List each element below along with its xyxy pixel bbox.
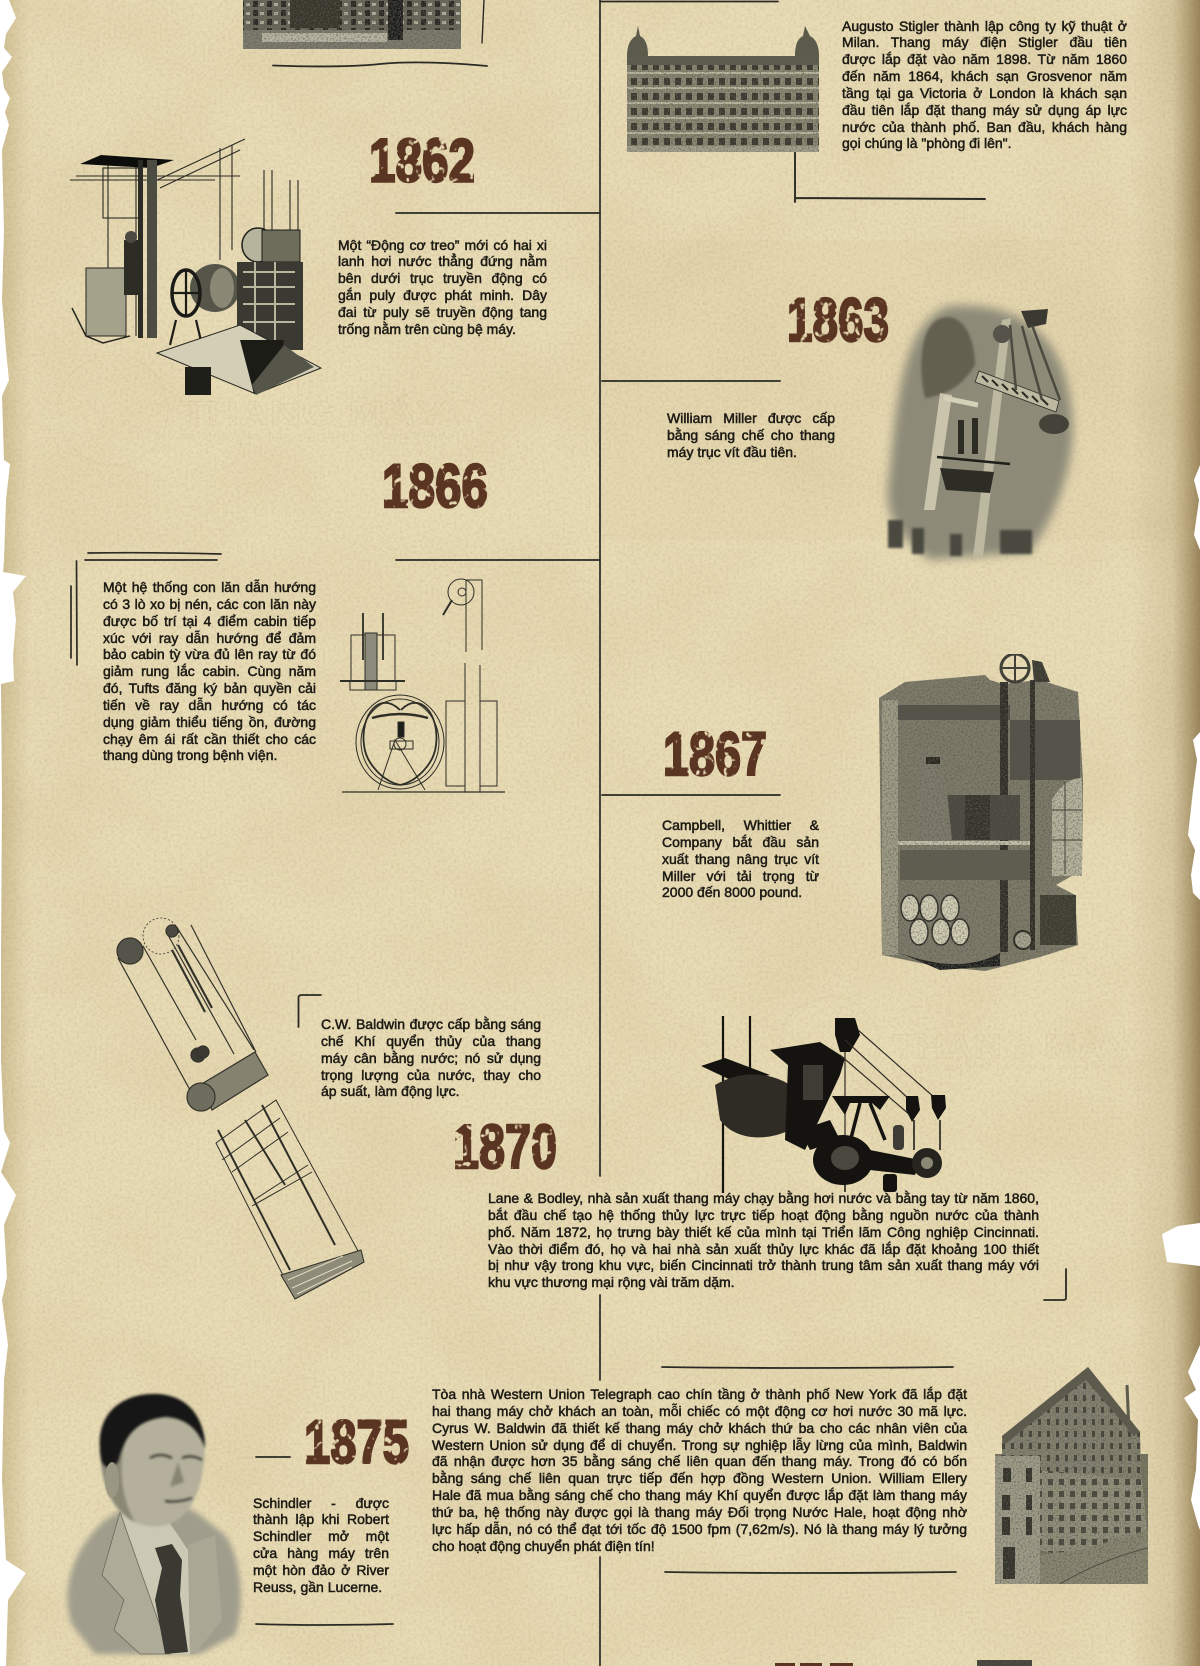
text: 1863 description: máy trục vít đầu tiên.	[667, 444, 797, 460]
text: 1866 description: bảo cabin tỳ vừa đủ lên ray từ đó	[103, 646, 316, 662]
text: Western Union building: hai thang máy chở khách an toàn, mỗi chiếc có một động cơ hơi nước 30 mã lực.	[432, 1403, 967, 1419]
text: Lane and Bodley: Vào thời điểm đó, họ và hai nhà sản xuất thủy lực khác đã lắp đặt khoảng 100 thiết	[488, 1241, 1039, 1257]
image: Grosvenor hotel	[627, 26, 819, 152]
text: Western Union building: lực hấp dẫn, nó có thể đạt tới tốc độ 1500 fpm (7,62m/s). Nó là thang máy lý tưởng	[432, 1521, 967, 1537]
year 1870: 1870	[453, 1113, 557, 1182]
year 1867: 1867	[663, 720, 767, 788]
text: Augusto Stigler: được lắp đặt vào năm 1898. Từ năm 1860	[842, 51, 1127, 67]
text: Augusto Stigler: Augusto Stigler thành lập công ty kỹ thuật ở	[842, 18, 1127, 34]
watermark: EV Thang Máy middle: THANG MÁY	[892, 1028, 1132, 1066]
watermark: EV Thang Máy upper	[58, 355, 445, 465]
text: Western Union building: Hale đã mua bằng sáng chế cho thang máy Khí quyển được lắp đặt làm thang máy	[432, 1487, 967, 1503]
text: 1866 description: thang dùng trong bệnh viện.	[103, 747, 277, 763]
year 1866: 1866	[382, 452, 488, 520]
bottom edge: next year heading cropped	[775, 1663, 853, 1666]
image: 1870 hydraulic machine	[701, 1016, 946, 1193]
image: 1866 guide roller patent drawing	[340, 579, 505, 792]
text: 1862 description: lanh hơi nước thẳng đứng nằm	[338, 253, 547, 269]
text: Augusto Stigler: đầu tiên lắp đặt thang máy sử dụng áp lực	[842, 102, 1127, 118]
text: C.W. Baldwin	[320, 1016, 541, 1100]
text: Augusto Stigler	[842, 18, 1127, 152]
year 1875: 1875	[304, 1408, 409, 1476]
text: Augusto Stigler: đến năm 1864, khách sạn Grosvenor năm	[842, 68, 1127, 84]
text: Schindler: một hòn đảo ở River	[253, 1562, 389, 1578]
text: 1862 description: trống nằm trên cùng bệ máy.	[338, 321, 516, 337]
text: 1867 description: Company bắt đầu sản	[662, 834, 819, 850]
text: Western Union building: cho hoạt động chuyển phát điện tín!	[432, 1538, 655, 1554]
text: Schindler: cửa hàng máy trên	[253, 1545, 389, 1561]
text: Western Union building: thứ ba, hệ thống này được gọi là thang máy Đối trọng Nước Hale, hoạt động nhờ	[432, 1504, 967, 1520]
text: 1866 description: tiến về ray dẫn hướng có tác	[103, 697, 316, 713]
text: 1866 description: dụng giảm thiểu tiếng ồn, đường	[103, 714, 316, 730]
text: 1866 description: Một hệ thống con lăn dẫn hướng	[103, 579, 316, 595]
text: C.W. Baldwin: chế Khí quyển thủy của thang	[321, 1033, 541, 1049]
text: Western Union building: Tòa nhà Western Union Telegraph cao chín tầng ở thành phố New York đã lắp đặt	[432, 1386, 967, 1402]
bottom edge: next image cropped	[977, 1660, 1032, 1666]
text: 1867 description	[662, 817, 820, 900]
watermark: EV Thang Máy middle	[780, 997, 1132, 1097]
text: Augusto Stigler: tầng tại ga Victoria ở London là khách sạn	[842, 85, 1127, 101]
image: Robert Schindler portrait	[67, 1394, 241, 1654]
image: 1863 elevator demonstration	[888, 306, 1073, 560]
text: 1866 description: giảm rung lắc cabin. Cùng năm	[103, 663, 316, 679]
year 1862: 1862	[369, 126, 475, 194]
watermark: EV Thang Máy upper: CƠ QUAN CỦA HIỆP HỘI THANG MÁY VIỆT NAM	[180, 432, 445, 441]
image: engraving of shop front, cropped at top	[243, 0, 461, 49]
text: Lane and Bodley: phố. Năm 1872, họ trưng bày thiết kế của mình tại Triển lãm Công nghiệp Cincinnati.	[488, 1224, 1039, 1240]
text: 1862 description	[338, 236, 548, 338]
text: 1862 description: Một “Động cơ treo” mới có hai xi	[338, 236, 547, 252]
text: 1867 description: xuất thang nâng trục vít	[662, 851, 819, 867]
image: Western Union building	[995, 1367, 1148, 1584]
text: Schindler	[252, 1494, 390, 1596]
text: Western Union building: Western Union sử dụng để di chuyển. Trong sự nghiệp lẫy lừng của mình, Baldwin	[432, 1437, 967, 1453]
text: 1866 description: có 3 lò xo bị nén, các con lăn này	[103, 596, 316, 612]
text: Lane and Bodley: Lane & Bodley, nhà sản xuất thang máy chạy bằng hơi nước và bằng tay từ năm 1860,	[488, 1190, 1039, 1206]
year 1863: 1863	[787, 286, 889, 354]
text: Western Union building: đã nhận được hơn 35 bằng sáng chế liên quan đến thang máy. Trong đó có bốn	[432, 1453, 967, 1469]
text: 1866 description: được bố trí tại 4 điểm cabin tiếp	[103, 613, 316, 629]
text: C.W. Baldwin: trọng lượng của nước, thay cho	[321, 1067, 541, 1083]
text: 1862 description: bên dưới trục truyền động có	[338, 270, 547, 286]
text: C.W. Baldwin: áp suất, làm động lực.	[321, 1083, 460, 1099]
text: 1867 description: Campbell, Whittier &	[662, 817, 819, 833]
text: 1867 description: 2000 đến 8000 pound.	[662, 884, 802, 900]
text: Western Union building: Cyrus W. Baldwin đã thiết kế thang máy chở khách thứ ba cho các nhân viên của	[432, 1420, 967, 1436]
image: hydraulic counterweight diagram, upper	[117, 918, 268, 1111]
text: 1866 description: chạy êm ái rất cần thiết cho các	[103, 731, 316, 747]
text: Western Union building	[432, 1386, 968, 1554]
text: C.W. Baldwin: C.W. Baldwin được cấp bằng sáng	[321, 1016, 541, 1032]
text: Schindler: Schindler - được	[253, 1494, 389, 1510]
image: 1862 steam engine	[70, 139, 321, 395]
text: Schindler: thành lập khi Robert	[253, 1511, 389, 1527]
text: Schindler: Reuss, gần Lucerne.	[253, 1579, 382, 1595]
text: Lane and Bodley: bị như vậy trong khu vực, biến Cincinnati trở thành trung tâm sản xuất thang máy với	[488, 1257, 1039, 1273]
text: Western Union building: bằng sáng chế liên quan trực tiếp đến hợp đồng Western Union. William Ellery	[432, 1470, 967, 1486]
text: 1866 description: đó, Tufts đăng ký bản quyền cải	[103, 680, 316, 696]
text: Augusto Stigler: Milan. Thang máy điện Stigler đầu tiên	[842, 34, 1127, 50]
text: Schindler: Schindler mở một	[253, 1528, 389, 1544]
text: 1862 description: gắn puly được phát minh. Dây	[338, 287, 547, 303]
text: 1863 description	[666, 410, 835, 460]
text: 1866 description	[102, 579, 316, 764]
text: 1863 description: bằng sáng chế cho thang	[667, 427, 835, 443]
text: 1862 description: đai từ puly sẽ truyền động tang	[338, 304, 547, 320]
text: Lane and Bodley: khu vực thương mại rộng vài trăm dặm.	[488, 1274, 735, 1290]
image: hydraulic counterweight diagram, lower	[216, 1100, 364, 1299]
text: 1866 description: xúc với ray dẫn hướng để đảm	[103, 630, 316, 646]
text: Lane and Bodley: bắt đầu chế tạo hệ thống thủy lực trực tiếp hoạt động bằng nguồn nước của thành	[488, 1207, 1039, 1223]
text: C.W. Baldwin: máy cân bằng nước; nó sử dụng	[321, 1050, 541, 1066]
image: 1867 screw hoist engraving	[879, 654, 1083, 971]
text: 1867 description: Miller với tải trọng từ	[662, 868, 819, 884]
watermark: EV Thang Máy middle: CƠ QUAN CỦA HIỆP HỘI THANG MÁY VIỆT NAM	[892, 1063, 1132, 1072]
watermark: EV Thang Máy upper: THANG MÁY	[180, 395, 445, 433]
text: Augusto Stigler: gọi chúng là "phòng đi lên".	[842, 135, 1012, 151]
text: 1863 description: William Miller được cấp	[667, 410, 835, 426]
text: Lane and Bodley	[488, 1190, 1040, 1290]
text: Augusto Stigler: nước của thành phố. Ban đầu, khách hàng	[842, 119, 1127, 135]
